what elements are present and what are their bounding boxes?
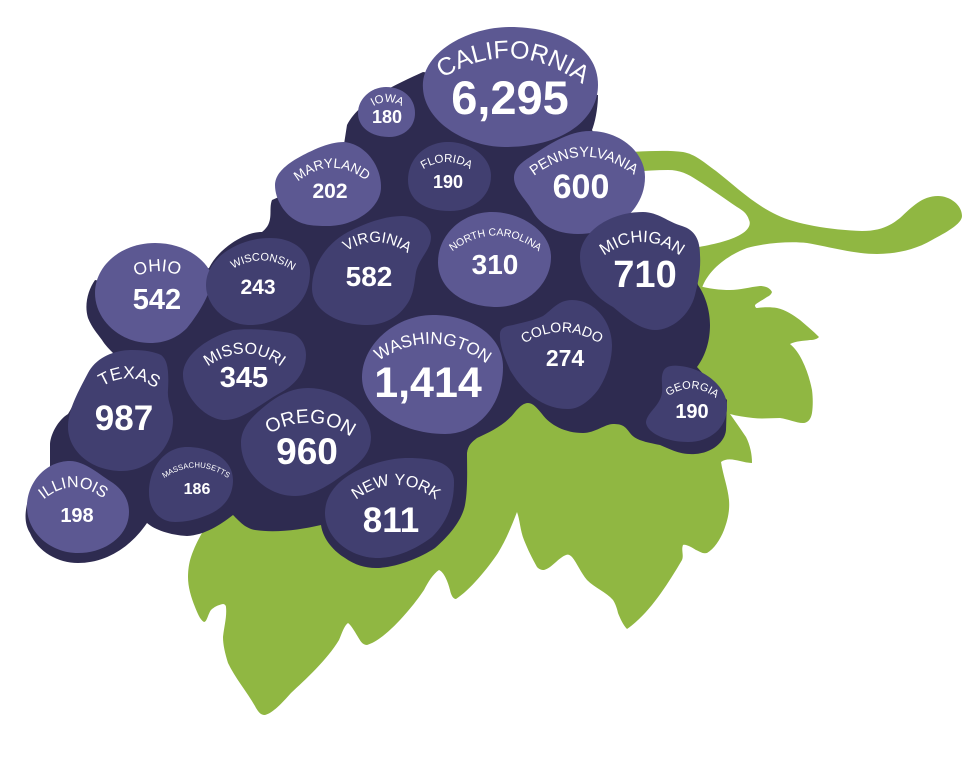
grape: Oregon 960: 960 (276, 431, 338, 472)
grape: Florida 190: 190 (433, 172, 463, 192)
grape: Virginia 582: VIRGINIA (341, 232, 410, 254)
grape: Georgia 190: 190 (675, 401, 709, 423)
grape: Florida 190: FLORIDA (420, 154, 471, 170)
grape: Colorado 274: 274 (546, 345, 584, 371)
grape: Georgia 190 (646, 366, 727, 442)
grape: Illinois 198: 198 (60, 505, 94, 527)
grape: California 6,295: CALIFORNIA (438, 40, 586, 84)
grape: Washington 1,414: 1,414 (374, 359, 482, 407)
grape: Illinois 198 (26, 461, 129, 553)
grape: Iowa 180 (358, 87, 415, 137)
grape: Washington 1,414 (362, 315, 503, 434)
grape: Texas 987: 987 (95, 399, 153, 438)
grape: Oregon 960: OREGON (266, 409, 356, 436)
grape: Texas 987 (68, 350, 173, 471)
grape: Maryland 202: MARYLAND (293, 158, 370, 181)
grape: California 6,295: 6,295 (451, 71, 569, 124)
grape: North Carolina 310: NORTH CAROLINA (448, 228, 540, 252)
grape: Pennsylvania 600 (514, 131, 645, 234)
grape: Massachusetts 186 (149, 447, 233, 522)
grape: Washington 1,414: WASHINGTON (372, 332, 492, 363)
grape: Iowa 180: 180 (372, 107, 402, 127)
grape: Missouri 345 (183, 329, 306, 420)
grape: Maryland 202: 202 (312, 180, 348, 203)
grape: Michigan 710: 710 (613, 254, 677, 296)
grape: Ohio 542: 542 (133, 284, 181, 316)
grape: Pennsylvania 600: 600 (553, 168, 609, 206)
grape: Massachusetts 186: 186 (184, 481, 210, 498)
grape vine stem and tendril (630, 151, 962, 288)
grape: Massachusetts 186: MASSACHUSETTS (162, 462, 230, 478)
grape: Pennsylvania 600: PENNSYLVANIA (529, 146, 636, 176)
grape: Wisconsin 243: WISCONSIN (230, 252, 296, 270)
grape: Virginia 582 (312, 216, 431, 325)
grape: North Carolina 310 (438, 212, 551, 307)
grape: Wisconsin 243: 243 (240, 276, 276, 299)
grape: Texas 987: TEXAS (97, 366, 160, 386)
grape: North Carolina 310: 310 (472, 249, 518, 280)
grape: Wisconsin 243 (206, 238, 310, 325)
grape: Oregon 960 (241, 388, 371, 496)
grape leaves (188, 285, 819, 715)
grape: Florida 190 (408, 142, 491, 211)
grape: Michigan 710 (580, 212, 700, 330)
grape: Maryland 202 (275, 142, 381, 226)
grape: New York 811 (325, 458, 454, 558)
grape: Georgia 190: GEORGIA (666, 380, 718, 398)
grape: Colorado 274 (500, 300, 612, 409)
grape: Iowa 180: IOWA (370, 94, 402, 106)
grape: Colorado 274: COLORADO (522, 322, 602, 342)
grape: Illinois 198: ILLINOIS (38, 476, 108, 499)
grape: Missouri 345: MISSOURI (203, 342, 286, 366)
grape: California 6,295 (422, 27, 598, 147)
grape cluster dark body (26, 72, 727, 568)
grape: Michigan 710: MICHIGAN (599, 230, 686, 255)
grape: Ohio 542 (95, 243, 210, 343)
grape: Virginia 582: 582 (346, 261, 392, 292)
grape: New York 811: NEW YORK (351, 474, 442, 500)
grape: Missouri 345: 345 (220, 362, 268, 394)
grape: Ohio 542: OHIO (134, 259, 180, 274)
grape: New York 811: 811 (363, 501, 419, 540)
